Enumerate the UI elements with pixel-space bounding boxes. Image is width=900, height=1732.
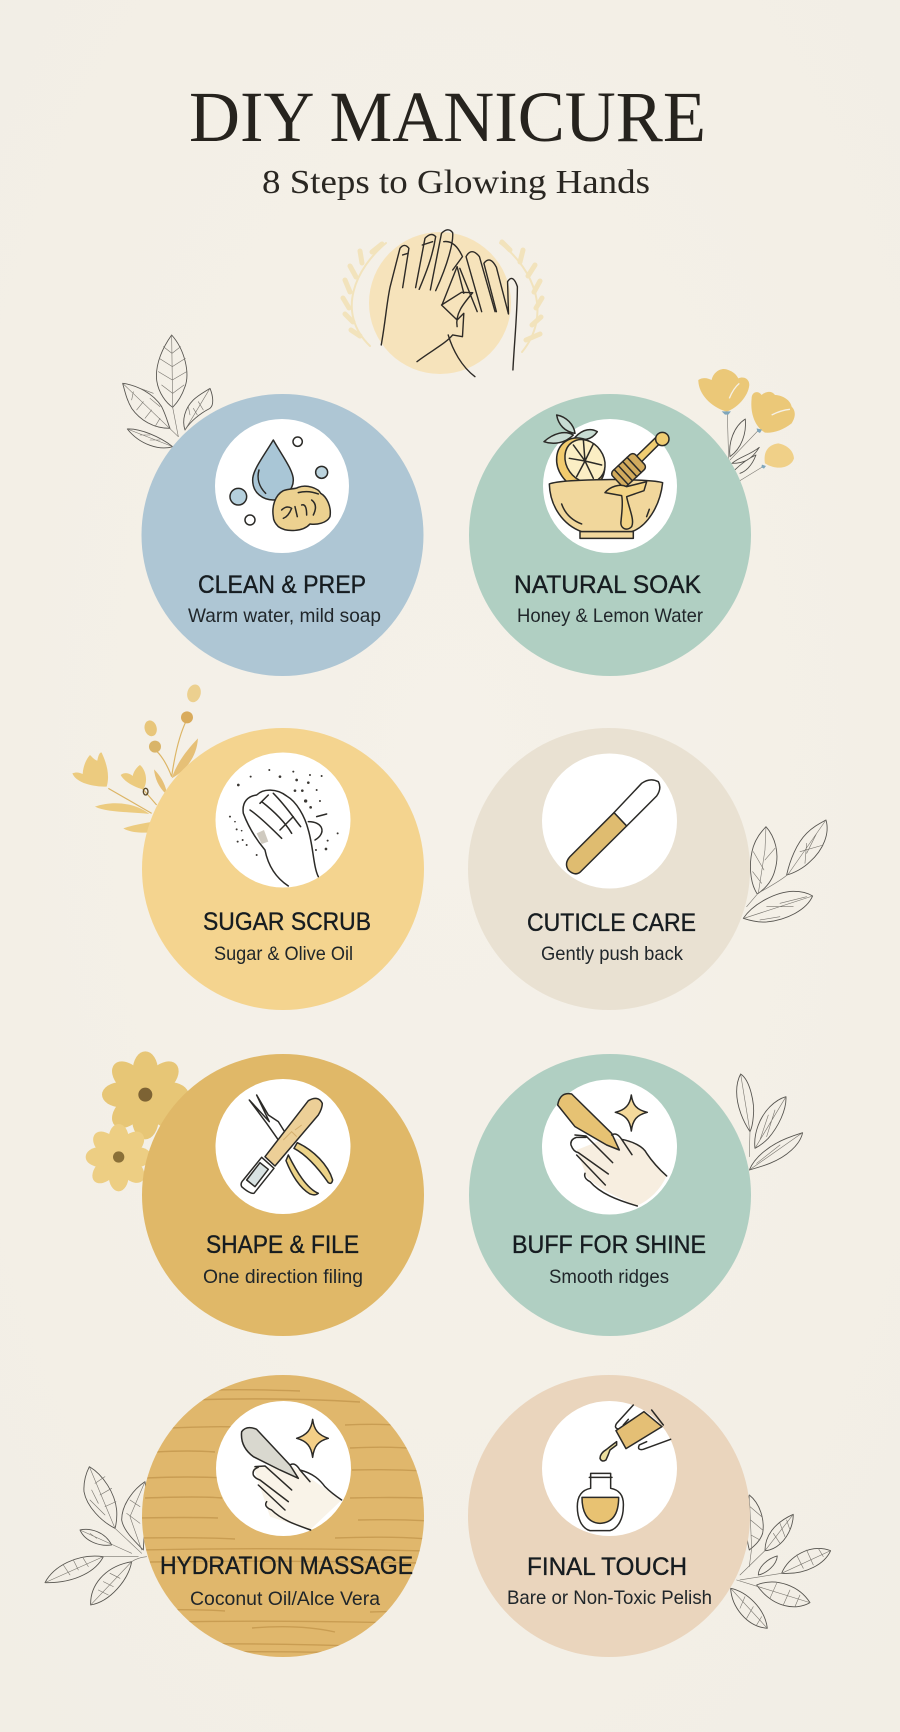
heading: NATURAL SOAK xyxy=(514,571,701,599)
description: Gently push back xyxy=(541,943,683,965)
icon: hand with scrub xyxy=(229,769,339,886)
description: Honey & Lemon Water xyxy=(517,605,703,627)
decoration: daisies xyxy=(86,1051,189,1191)
description: Warm water, mild soap xyxy=(188,605,381,627)
circle background xyxy=(142,1375,424,1657)
circle background xyxy=(469,394,751,676)
heading: CUTICLE CARE xyxy=(527,909,696,937)
panel: step 6 buff for shine xyxy=(469,1054,803,1336)
icon: polish bottle and dropper xyxy=(577,1405,671,1531)
icon background xyxy=(216,752,350,888)
circle background xyxy=(468,728,750,1010)
icon background xyxy=(542,1401,677,1536)
panel: step 7 hydration massage xyxy=(45,1375,428,1657)
title: DIY MANICURE xyxy=(189,77,706,157)
circle background xyxy=(469,1054,751,1336)
icon: hand buffing nail with sparkle xyxy=(558,1094,667,1206)
decoration: line leaves xyxy=(123,335,213,448)
heading: HYDRATION MASSAGE xyxy=(160,1552,413,1580)
decoration: golden sprigs xyxy=(72,683,203,833)
icon: cuticle pusher xyxy=(567,780,660,874)
decoration: line leaves xyxy=(731,1495,831,1628)
wood grain xyxy=(140,1390,428,1653)
icon background xyxy=(215,419,349,553)
icon background xyxy=(216,1401,351,1536)
icon background xyxy=(543,419,677,553)
decoration: line leaves xyxy=(743,820,827,922)
icon: hand massaging with sparkle xyxy=(241,1419,342,1530)
description: Coconut Oil/Alce Vera xyxy=(190,1588,380,1610)
icon background xyxy=(216,1079,350,1214)
panel: step 8 final touch xyxy=(468,1375,831,1657)
subtitle: 8 Steps to Glowing Hands xyxy=(262,164,650,201)
icon: water drop and soap xyxy=(230,437,330,531)
heading: SHAPE & FILE xyxy=(206,1231,359,1259)
circle background xyxy=(142,394,424,676)
heading: FINAL TOUCH xyxy=(527,1553,687,1581)
panel: step 5 shape and file xyxy=(86,1051,424,1336)
icon: lemon, honey and bowl xyxy=(544,415,669,538)
circle background xyxy=(142,1054,424,1336)
panel: step 3 sugar scrub xyxy=(72,683,424,1010)
heading: CLEAN & PREP xyxy=(198,571,366,599)
decoration: line leaves xyxy=(45,1467,147,1605)
description: Bare or Non-Toxic Pelish xyxy=(507,1587,712,1609)
circle background xyxy=(142,728,424,1010)
description: One direction filing xyxy=(203,1266,363,1288)
icon background xyxy=(542,1080,677,1214)
heading: SUGAR SCRUB xyxy=(203,908,371,936)
decoration: sage leaves xyxy=(737,1074,803,1170)
panel: step 4 cuticle care xyxy=(468,728,827,1010)
description: Smooth ridges xyxy=(549,1266,669,1288)
icon: hands emblem xyxy=(343,230,542,377)
panel: step 2 natural soak xyxy=(469,369,795,676)
heading: BUFF FOR SHINE xyxy=(512,1231,706,1259)
decoration: yellow flowers xyxy=(698,369,795,481)
description: Sugar & Olive Oil xyxy=(214,943,353,965)
panel: step 1 clean and prep xyxy=(123,335,423,676)
circle background xyxy=(468,1375,750,1657)
icon: nail nippers and file xyxy=(241,1095,333,1195)
icon background xyxy=(542,754,677,888)
